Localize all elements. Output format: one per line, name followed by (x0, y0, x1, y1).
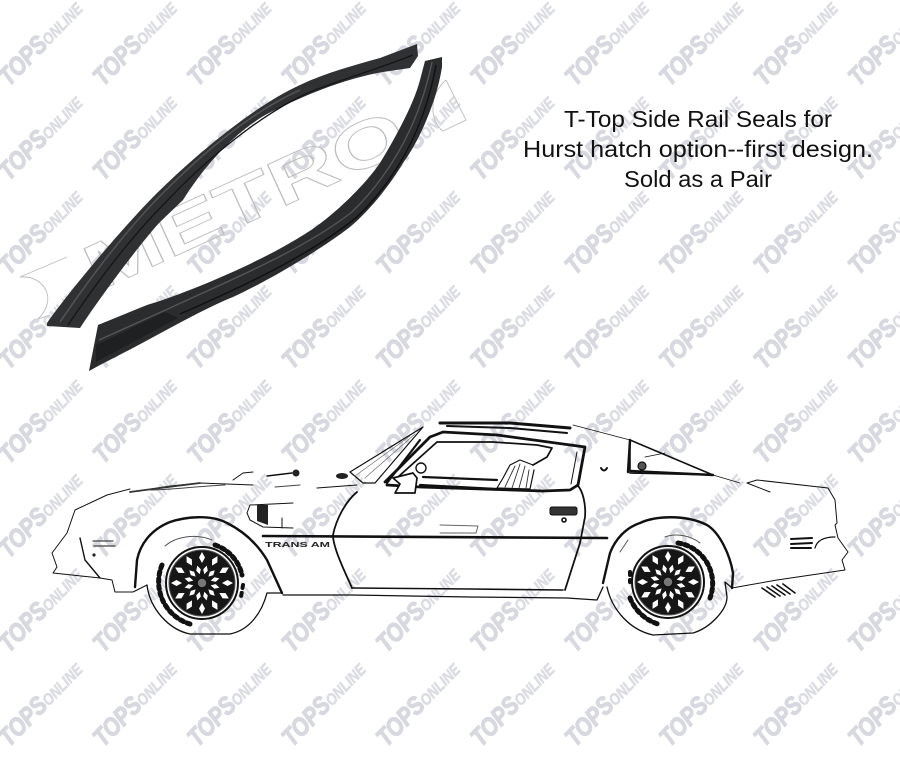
description text: Hurst hatch option--first design. (523, 136, 873, 162)
watermark grid: TOPS ONLINE: TOPSONLINE (559, 182, 655, 280)
watermark grid: TOPS ONLINE: TOPSONLINE (465, 182, 560, 280)
watermark grid: TOPS ONLINE: TOPSONLINE (465, 276, 560, 374)
watermark grid: TOPS ONLINE: TOPSONLINE (465, 0, 560, 91)
watermark grid: TOPS ONLINE: TOPSONLINE (87, 465, 183, 563)
watermark grid: TOPS ONLINE: TOPSONLINE (370, 559, 466, 657)
watermark grid: TOPS ONLINE: TOPSONLINE (181, 465, 277, 563)
front bumper details (80, 538, 115, 578)
car line drawing (52, 423, 848, 635)
watermark grid: TOPS ONLINE: TOPSONLINE (465, 654, 560, 752)
watermark grid: TOPS ONLINE: TOPSONLINE (87, 182, 183, 280)
watermark grid: TOPS ONLINE: TOPSONLINE (465, 371, 560, 468)
watermark grid: TOPS ONLINE: TOPSONLINE (559, 0, 655, 91)
watermark grid: TOPS ONLINE: TOPSONLINE (181, 371, 277, 468)
fender vent (247, 503, 293, 528)
watermark grid: TOPS ONLINE: TOPSONLINE (465, 87, 560, 185)
watermark grid: TOPS ONLINE: TOPSONLINE (653, 654, 749, 752)
rear tire lettering (630, 543, 713, 624)
description text (523, 106, 873, 192)
watermark grid: TOPS ONLINE: TOPSONLINE (276, 276, 372, 374)
watermark grid: TOPS ONLINE: TOPSONLINE (181, 559, 277, 657)
T-top glass (440, 423, 570, 433)
front tire lettering (159, 545, 243, 624)
description text: T-Top Side Rail Seals for (564, 106, 832, 132)
door window frame (385, 432, 585, 491)
watermark grid: TOPS ONLINE: TOPSONLINE (276, 654, 372, 752)
rear wheel (632, 546, 704, 618)
watermark grid: TOPS ONLINE: TOPSONLINE (87, 559, 183, 657)
watermark grid: TOPS ONLINE: TOPSONLINE (370, 276, 466, 374)
watermark grid: TOPS ONLINE: TOPSONLINE (276, 465, 372, 563)
watermark grid: TOPS ONLINE: TOPSONLINE (748, 182, 844, 280)
watermark grid: TOPS ONLINE: TOPSONLINE (87, 654, 183, 752)
seal: upper left rail (47, 44, 418, 328)
windshield (336, 427, 423, 483)
watermark grid: TOPS ONLINE: TOPSONLINE (748, 465, 844, 563)
watermark grid: TOPS ONLINE: TOPSONLINE (370, 371, 466, 468)
watermark grid: TOPS ONLINE: TOPSONLINE (181, 276, 277, 374)
hood details (130, 470, 300, 492)
watermark grid: TOPS ONLINE: TOPSONLINE (370, 0, 466, 91)
watermark grid: TOPS ONLINE: TOPSONLINE (653, 87, 749, 185)
watermark grid: TOPS ONLINE: TOPSONLINE (748, 0, 844, 91)
watermark grid: TOPS ONLINE: TOPSONLINE (276, 559, 372, 657)
watermark grid: TOPS ONLINE: TOPSONLINE (276, 182, 372, 280)
watermark grid: TOPS ONLINE: TOPSONLINE (181, 182, 277, 280)
watermark grid: TOPS ONLINE: TOPSONLINE (653, 371, 749, 468)
description text: Sold as a Pair (624, 166, 772, 192)
watermark grid: TOPS ONLINE: TOPSONLINE (370, 87, 466, 185)
watermark grid: TOPS ONLINE: TOPSONLINE (370, 654, 466, 752)
door shut lines (333, 485, 585, 590)
tail light vent (791, 537, 835, 548)
watermark grid: TOPS ONLINE: TOPSONLINE (276, 0, 372, 91)
watermark grid: TOPS ONLINE: TOPSONLINE (653, 182, 749, 280)
watermark grid: TOPS ONLINE: TOPSONLINE (465, 559, 560, 657)
watermark grid: TOPS ONLINE: TOPSONLINE (559, 276, 655, 374)
exhaust stripes (762, 584, 795, 597)
seal: lower right rail (89, 57, 442, 371)
watermark grid: TOPS ONLINE: TOPSONLINE (181, 0, 277, 91)
Metro logo outline (20, 80, 466, 319)
watermark grid: TOPS ONLINE: TOPSONLINE (559, 465, 655, 563)
watermark grid: TOPS ONLINE: TOPSONLINE (276, 371, 372, 468)
watermark grid: TOPS ONLINE: TOPSONLINE (87, 0, 183, 91)
watermark grid: TOPS ONLINE: TOPSONLINE (181, 87, 277, 185)
watermark grid: TOPS ONLINE: TOPSONLINE (748, 654, 844, 752)
watermark grid: TOPS ONLINE: TOPSONLINE (87, 276, 183, 374)
seat (497, 460, 534, 489)
watermark grid: TOPS ONLINE: TOPSONLINE (87, 87, 183, 185)
watermark grid: TOPS ONLINE: TOPSONLINE (653, 276, 749, 374)
door handle and lock (440, 468, 607, 533)
watermark grid: TOPS ONLINE: TOPSONLINE (653, 0, 749, 91)
watermark grid: TOPS ONLINE: TOPSONLINE (559, 654, 655, 752)
watermark grid: TOPS ONLINE: TOPSONLINE (748, 276, 844, 374)
watermark grid: TOPS ONLINE: TOPSONLINE (748, 87, 844, 185)
Metro logo outline: METRO (72, 95, 417, 305)
watermark grid: TOPS ONLINE: TOPSONLINE (559, 87, 655, 185)
watermark grid: TOPS ONLINE: TOPSONLINE (370, 465, 466, 563)
watermark grid: TOPS ONLINE: TOPSONLINE (276, 87, 372, 185)
watermark grid: TOPS ONLINE: TOPSONLINE (559, 559, 655, 657)
watermark grid: TOPS ONLINE: TOPSONLINE (748, 559, 844, 657)
watermark grid: TOPS ONLINE: TOPSONLINE (370, 182, 466, 280)
watermark grid: TOPS ONLINE: TOPSONLINE (748, 371, 844, 468)
rear wheel arch and tire (603, 517, 733, 635)
watermark grid: TOPS ONLINE: TOPSONLINE (559, 371, 655, 468)
quarter window (628, 440, 713, 475)
car body outline (52, 425, 848, 600)
watermark grid: TOPS ONLINE: TOPSONLINE (87, 371, 183, 468)
side stripe (263, 536, 607, 538)
front wheel (166, 547, 238, 619)
Trans Am badge: TRANS AM (265, 542, 330, 549)
watermark grid: TOPS ONLINE: TOPSONLINE (653, 465, 749, 563)
watermark grid: TOPS ONLINE: TOPSONLINE (653, 559, 749, 657)
watermark grid: TOPS ONLINE: TOPSONLINE (181, 654, 277, 752)
watermark grid: TOPS ONLINE: TOPSONLINE (465, 465, 560, 563)
side mirror (393, 463, 426, 493)
front wheel arch and tire (135, 517, 282, 634)
